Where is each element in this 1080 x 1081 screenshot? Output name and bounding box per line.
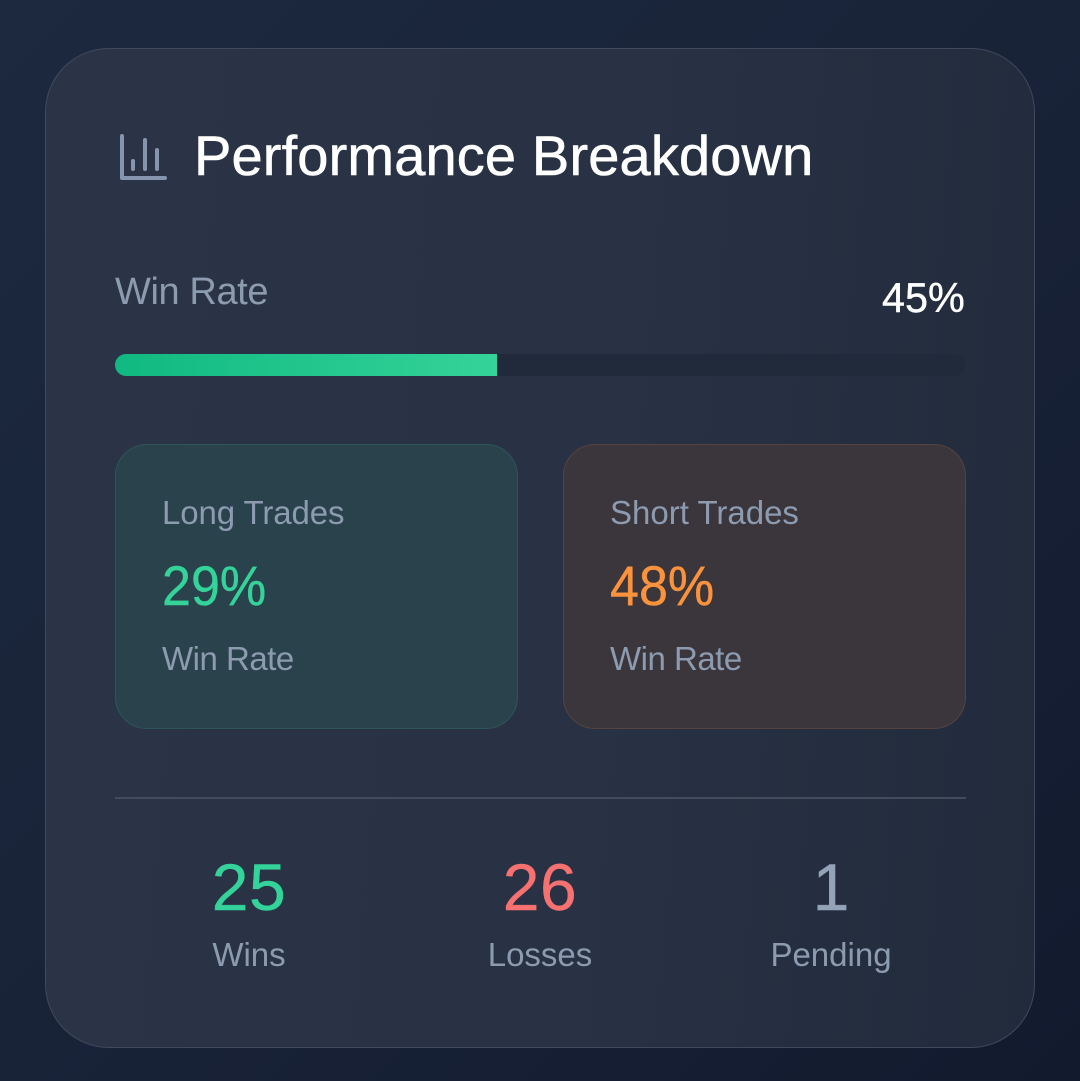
losses value: 26	[503, 850, 577, 924]
pending value: 1	[813, 850, 849, 924]
short trades value: 48%	[610, 554, 714, 617]
progress fill 45%	[115, 354, 497, 376]
losses label: Losses	[488, 936, 592, 973]
short trades label: Short Trades	[610, 494, 799, 531]
panel: short trades	[563, 444, 966, 729]
wins label: Wins	[212, 936, 286, 973]
short trades sublabel: Win Rate	[610, 640, 742, 677]
win rate label: Win Rate	[115, 271, 268, 313]
long trades value: 29%	[162, 554, 266, 617]
stat: wins	[212, 850, 286, 973]
pending label: Pending	[770, 936, 892, 973]
stat: pending	[770, 850, 892, 973]
title: Performance Breakdown	[194, 124, 813, 187]
long trades sublabel: Win Rate	[162, 640, 294, 677]
panel: long trades	[115, 444, 518, 729]
progress bar	[115, 354, 966, 376]
icon: bar chart	[120, 134, 167, 180]
long trades label: Long Trades	[162, 494, 344, 531]
stat: losses	[488, 850, 592, 973]
wins value: 25	[212, 850, 286, 924]
win rate value: 45%	[882, 274, 965, 321]
